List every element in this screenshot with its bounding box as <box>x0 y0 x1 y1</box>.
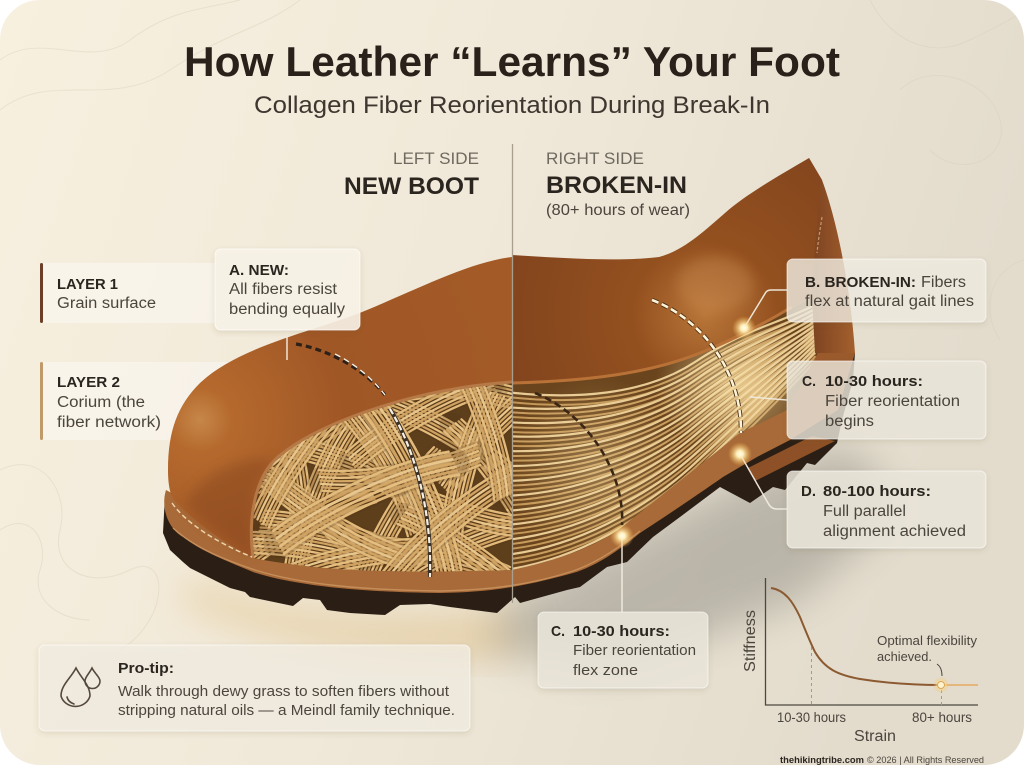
callout: D 80-100 hours: D. <box>801 483 816 500</box>
subtitle: Collagen Fiber Reorientation During Break-In <box>254 92 770 119</box>
left side header: LEFT SIDE <box>393 150 479 168</box>
left leather upper <box>168 257 512 558</box>
illustration: boot cross-section <box>163 158 855 617</box>
panel: pro-tip <box>39 645 470 731</box>
callout: C 10-30 hours: Fiber reorientation <box>825 393 960 410</box>
outsole with lugs <box>163 353 855 615</box>
callout: C flex zone <box>538 612 708 688</box>
dashed flex line B <box>652 300 741 433</box>
dashed flex line A <box>296 344 430 577</box>
callout: C flex zone: flex zone <box>573 662 638 679</box>
chart: stiffness vs strain: 80+ hours <box>912 710 972 725</box>
boot shadow: warm toe <box>180 580 520 654</box>
callout: B broken-in: B. BROKEN-IN: <box>805 274 916 291</box>
callout: A new <box>215 249 360 330</box>
annotation arrow <box>937 664 942 676</box>
callout: D 80-100 hours: alignment achieved <box>823 523 966 540</box>
panel: layer 1: Grain surface <box>57 295 156 312</box>
callout: D 80-100 hours: Full parallel <box>823 503 906 520</box>
leather crease glow <box>677 257 753 313</box>
boot shadow: grey heel <box>490 445 900 670</box>
right side header: RIGHT SIDE <box>546 150 644 168</box>
callout: C flex zone: Fiber reorientation <box>573 642 696 659</box>
panel: pro-tip: Pro-tip: <box>118 660 174 677</box>
welt stitching <box>172 503 252 557</box>
welt edge highlight <box>173 528 640 591</box>
title: How Leather “Learns” Your Foot <box>184 38 840 85</box>
callout: A new: A. NEW: <box>229 262 289 279</box>
chart: stiffness vs strain: Strain <box>854 728 896 745</box>
footer credit <box>780 755 984 765</box>
right leather upper <box>512 158 822 382</box>
leader lines <box>287 290 787 612</box>
right cut edge <box>512 307 792 383</box>
panel: pro-tip: stripping natural oils — a Meindl family technique. <box>118 702 455 719</box>
left side header <box>346 152 479 194</box>
callout: D 80-100 hours: 80-100 hours: <box>823 483 931 500</box>
heel wall <box>809 158 855 353</box>
right side header <box>546 150 690 219</box>
callout: C flex zone: C. <box>551 623 565 640</box>
panel: layer 1 <box>40 263 215 323</box>
marker <box>933 677 949 693</box>
panel: layer 2: Corium (the <box>57 394 145 411</box>
callout: B broken-in <box>787 259 986 322</box>
stiffness curve <box>771 588 941 685</box>
callout: C 10-30 hours: begins <box>825 413 874 430</box>
callout: B broken-in: flex at natural gait lines <box>805 293 974 310</box>
chart: stiffness vs strain: 10-30 hours <box>777 710 846 725</box>
heel counter behind card <box>790 353 855 440</box>
heel stitching <box>817 217 822 253</box>
chart: stiffness vs strain: Stiffness <box>742 610 759 672</box>
panel: layer 2 <box>40 362 235 440</box>
glowing marker B <box>733 317 755 339</box>
callout: C flex zone: 10-30 hours: <box>573 623 670 640</box>
heel welt <box>748 436 835 481</box>
panel: layer 2: LAYER 2 <box>57 374 120 391</box>
panel: layer 1: LAYER 1 <box>57 276 118 293</box>
chart: stiffness vs strain: achieved. <box>877 649 932 664</box>
dashed flex line C <box>535 393 622 525</box>
left leather shade <box>185 459 275 556</box>
axes <box>766 578 978 705</box>
left fibers: tangled network <box>252 384 512 572</box>
callout: B broken-in: Fibers <box>921 274 966 291</box>
callout: C 10-30 hours: 10-30 hours: <box>825 373 923 390</box>
panel: pro-tip: Walk through dewy grass to soften fibers without <box>118 683 450 700</box>
callout: C 10-30 hours <box>787 361 986 439</box>
right side header: (80+ hours of wear) <box>546 202 690 219</box>
glowing marker C <box>611 524 634 548</box>
callout: D 80-100 hours <box>787 471 986 548</box>
chart: stiffness vs strain: Optimal flexibility <box>877 633 978 648</box>
chart: stiffness vs strain <box>742 578 978 745</box>
right side header: BROKEN-IN <box>546 172 687 199</box>
right fibers: parallel alignment <box>505 295 825 580</box>
glowing marker D <box>729 443 751 465</box>
icon: water drops <box>61 668 100 706</box>
callout: A new: All fibers resist <box>229 281 338 298</box>
callout: C 10-30 hours: C. <box>802 373 816 390</box>
left cut edge <box>251 382 512 558</box>
panel: layer 2: fiber network) <box>57 414 161 431</box>
welt <box>164 350 850 593</box>
divider <box>512 144 514 603</box>
guide lines <box>812 647 942 705</box>
left side header: NEW BOOT <box>344 173 479 200</box>
callout: A new: bending equally <box>229 301 345 318</box>
